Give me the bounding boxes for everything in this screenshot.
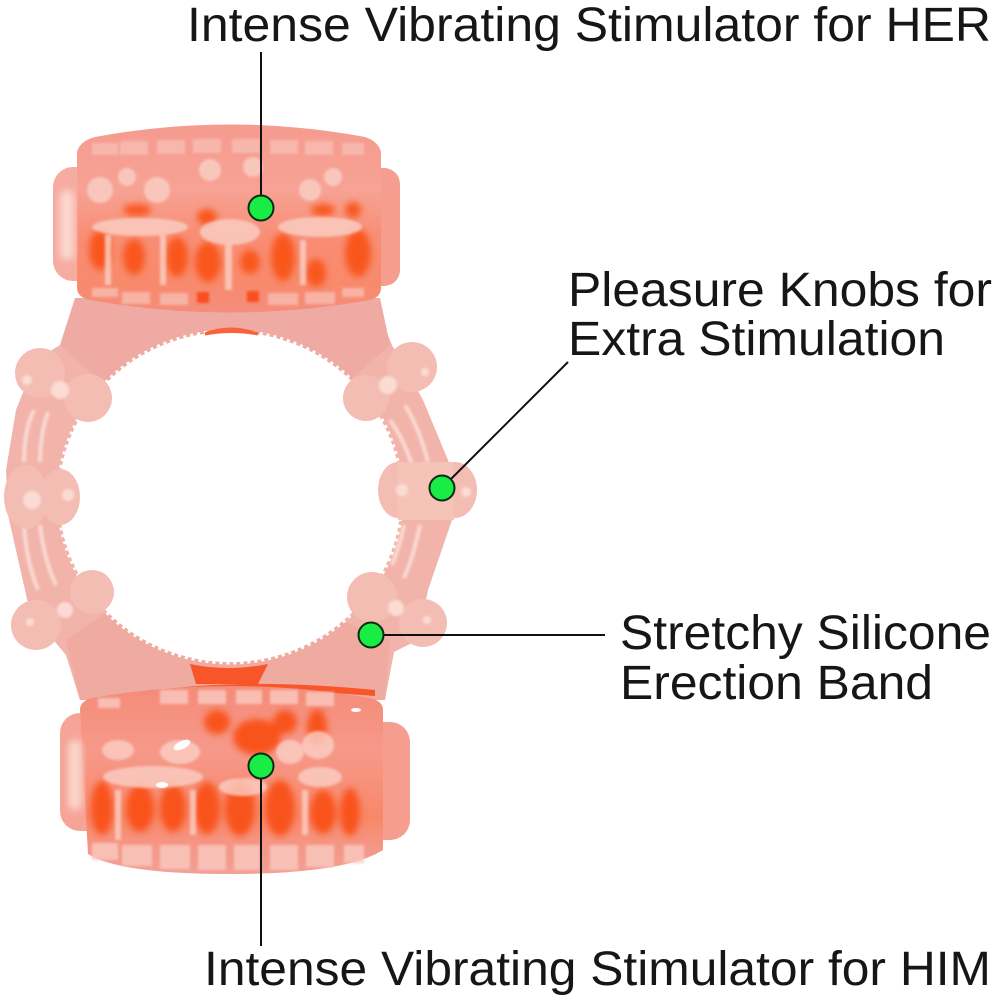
lower arms shading bbox=[66, 610, 390, 700]
label: pleasure knobs bbox=[568, 264, 992, 366]
ring opening bbox=[59, 332, 401, 662]
label: pleasure knobs: Pleasure Knobs for bbox=[568, 264, 992, 317]
body bbox=[80, 686, 383, 874]
end highlight bbox=[68, 740, 82, 810]
lens highlights bbox=[102, 731, 342, 840]
label: pleasure knobs: Extra Stimulation bbox=[568, 313, 945, 366]
leader line: HER bbox=[260, 52, 262, 208]
top stimulator bbox=[53, 124, 400, 312]
erection band bbox=[6, 298, 452, 700]
bottom stimulator bbox=[60, 686, 410, 874]
white glints bbox=[156, 708, 361, 788]
pleasure knobs bbox=[4, 342, 477, 650]
tile rows bbox=[92, 690, 364, 870]
label: silicone band: Stretchy Silicone bbox=[620, 607, 991, 660]
tile rows bbox=[92, 139, 364, 305]
marker: knobs bbox=[430, 476, 454, 500]
label: stimulator for him: Intense Vibrating Stimulator for HIM bbox=[204, 943, 991, 996]
small orange dots bbox=[197, 291, 259, 303]
leader line: band bbox=[371, 634, 605, 636]
body bbox=[77, 124, 381, 312]
lower orange bridge bbox=[190, 664, 268, 684]
product: silicone ring bbox=[4, 124, 477, 874]
end caps bbox=[60, 713, 110, 831]
marker: HER bbox=[248, 196, 274, 220]
marker: HIM bbox=[248, 754, 274, 778]
top orange teeth bbox=[205, 329, 258, 334]
leader line: knobs bbox=[442, 362, 568, 488]
serrated edge bbox=[58, 331, 402, 663]
marker: band bbox=[358, 622, 384, 648]
label: stimulator for her: Intense Vibrating Stimulator for HER bbox=[187, 0, 991, 52]
band ridges bbox=[24, 405, 428, 590]
knobs and lens highlights bbox=[87, 157, 362, 290]
end caps bbox=[53, 167, 103, 281]
orange cores bbox=[91, 709, 360, 836]
leader line: HIM bbox=[260, 766, 262, 946]
label: silicone band: Erection Band bbox=[620, 657, 933, 710]
upper arms shading bbox=[60, 298, 390, 385]
orange cores bbox=[89, 202, 371, 287]
label: silicone band bbox=[620, 607, 991, 710]
end highlight bbox=[60, 190, 74, 260]
